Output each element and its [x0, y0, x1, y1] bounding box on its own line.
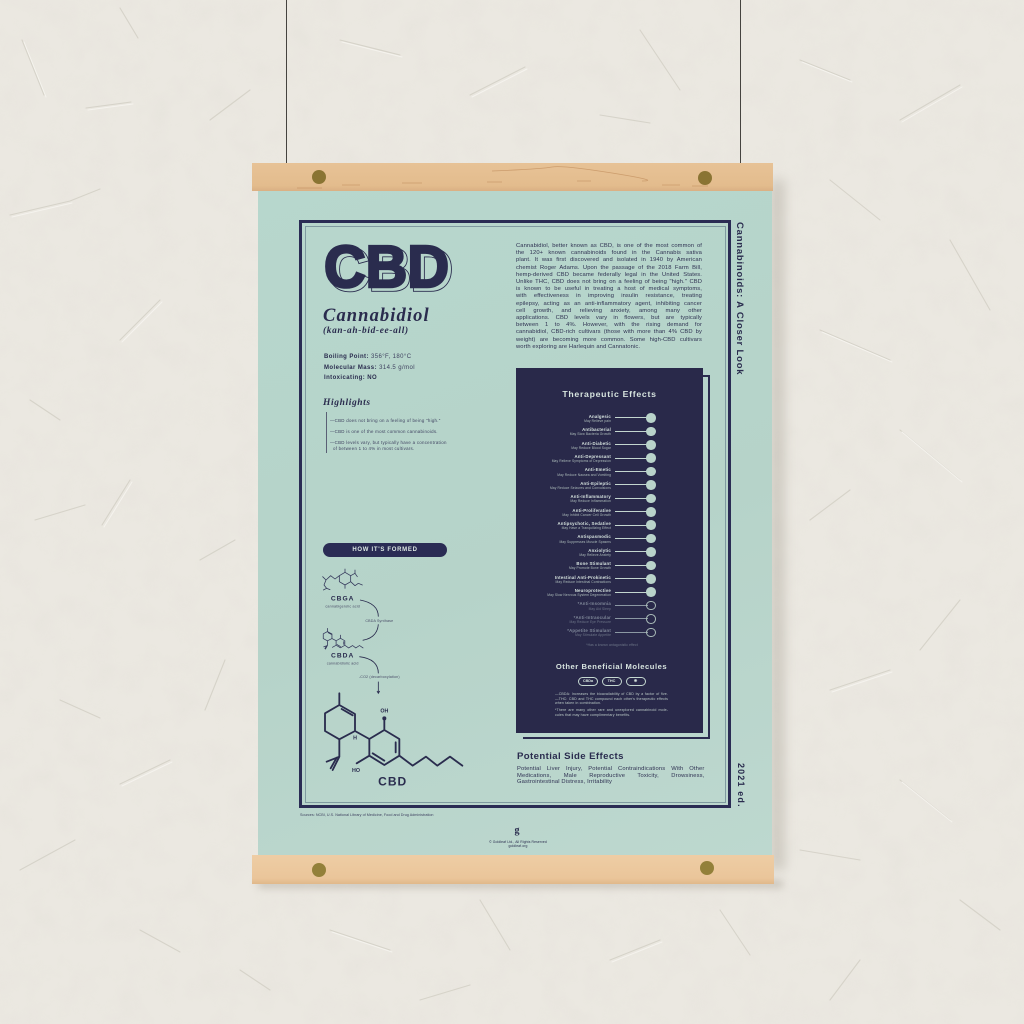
intro paragraph: is known to be useful in treating a host of medical symptoms, — [516, 286, 702, 292]
right hanging wire — [740, 0, 741, 164]
text: Molecular Mass: 314.5 g/mol — [324, 365, 415, 371]
effect: Antipsychotic, Sedative: Antipsychotic, Sedative — [557, 521, 611, 526]
effect: Anti-Proliferative: Anti-Proliferative — [572, 508, 611, 513]
decarboxylation label: -CO2 (decarboxylation) — [359, 675, 400, 679]
other beneficial molecules heading: Other Beneficial Molecules — [556, 662, 667, 670]
effect: Appetite Stimulant: May Stimulate Appetite — [575, 633, 611, 637]
effect: Anti-Insomnia: *Anti-Insomnia — [578, 601, 611, 606]
how it's formed pill heading — [323, 543, 447, 557]
H label: H — [353, 736, 357, 742]
highlight 3: of between 1 to 4% in most cultivars. — [333, 446, 414, 450]
molecule notes: cules that may have complimentary benefits. — [555, 712, 630, 716]
effect: Appetite Stimulant: *Appetite Stimulant — [567, 628, 611, 633]
highlight 1: —CBD does not bring on a feeling of being "high." — [330, 418, 441, 422]
HO label: HO — [352, 768, 360, 774]
panel: therapeutic effects — [516, 368, 703, 733]
effect: Anti-Inflammatory — [570, 494, 656, 503]
highlight 3: —CBD levels vary, but typically have a concentration — [330, 440, 447, 444]
effect: Bone Stimulant — [569, 561, 656, 570]
intro paragraph — [516, 243, 702, 350]
top left screw — [312, 170, 326, 184]
effect: Anti-Intraocular — [569, 614, 656, 624]
potential side effects text: Potential Liver Injury, Potential Contraindications With Other — [517, 766, 704, 772]
highlights vertical rule — [326, 412, 327, 453]
effect: Anti-Proliferative — [562, 507, 656, 517]
effect: Anxiolytic: Anxiolytic — [588, 548, 611, 553]
intro paragraph: Cannabidiol, better known as CBD, is one of the most common of — [516, 243, 702, 249]
left hanging wire — [286, 0, 287, 164]
highlight 2: —CBD is one of the most common cannabinoids. — [330, 428, 438, 434]
effect: Intestinal Anti-Prokinetic: Intestinal Anti-Prokinetic — [555, 575, 611, 580]
sources: Sources: NCBI, U.S. National Library of Medicine, Food and Drug Administration — [300, 813, 434, 817]
effect: Neuroprotective — [547, 587, 656, 597]
effect: Anxiolytic — [579, 547, 656, 557]
CBGA label: CBGA — [331, 596, 354, 603]
effect: Anti-Epileptic: Anti-Epileptic — [580, 481, 611, 486]
formation diagram — [322, 568, 464, 789]
effect: Bone Stimulant: Bone Stimulant — [576, 561, 611, 566]
potential side effects text: Gastrointestinal Distress, Irritability — [517, 779, 612, 785]
effect: Antipsychotic, Sedative: May Have a Tranquilizing Effect — [562, 526, 611, 530]
top right screw — [698, 170, 712, 184]
therapeutic effects heading: Therapeutic Effects — [562, 389, 657, 399]
effect: Anti-Diabetic — [571, 440, 656, 450]
effect: Intestinal Anti-Prokinetic: May Reduce Intestinal Contractions — [556, 580, 611, 584]
CBD molecule — [325, 693, 462, 770]
molecule notes — [555, 692, 668, 717]
effect: Anti-Diabetic: Anti-Diabetic — [582, 441, 611, 446]
molecule notes: *There are many other rare and unexplored cannabinoid mole- — [555, 708, 668, 712]
intro paragraph: cell growth, and relieving anxiety, among many other — [516, 308, 702, 314]
effect: Antipsychotic, Sedative — [557, 520, 656, 530]
top wooden hanger — [252, 163, 773, 191]
CBDA label: CBDA — [331, 653, 354, 660]
potential side effects text — [517, 766, 704, 785]
inner frame — [305, 226, 726, 803]
poster shadow on wall — [770, 180, 784, 870]
arc from CBDA to decarboxylation — [359, 657, 378, 673]
pronunciation: (kan-ah-bid-ee-all) — [323, 326, 409, 336]
intro paragraph: between 1 to 4%. However, with the rising demand for — [516, 322, 702, 328]
effect: Analgesic — [584, 413, 656, 423]
vertical edition: 2021 ed. — [736, 763, 746, 808]
panel offset outline — [523, 375, 710, 739]
effect: Anxiolytic: May Relieve Anxiety — [579, 553, 611, 557]
name: Cannabidiol: Cannabidiol — [323, 306, 430, 326]
effect: Anti-Inflammatory: May Reduce Inflammation — [570, 499, 611, 503]
highlight 3 — [330, 440, 447, 450]
effect: Antispasmodic: Antispasmodic — [577, 534, 611, 539]
effect: Antibacterial: May Slow Bacteria Growth — [570, 432, 611, 436]
effect: Anti-Epileptic: May Reduce Seizures and Convulsions — [550, 486, 611, 490]
text: Intoxicating: NO — [324, 375, 377, 381]
CBDA synthase label: CBDA Synthase — [365, 619, 393, 623]
effect: Neuroprotective: Neuroprotective — [575, 588, 611, 593]
effect: Anti-Depressant: Anti-Depressant — [574, 454, 611, 459]
effect: Anti-Emetic — [557, 467, 656, 477]
effect: Analgesic: Analgesic — [589, 414, 611, 419]
intro paragraph: chemist Roger Adams. Upon the passage of the 2018 Farm Bill, — [516, 265, 702, 271]
CBGA molecule — [323, 569, 362, 590]
arrow to CBD — [377, 682, 380, 693]
effect: Anti-Inflammatory: Anti-Inflammatory — [570, 494, 611, 499]
text: Boiling Point: 356°F, 180°C — [324, 354, 412, 360]
copyright: goldleaf.org — [509, 844, 527, 848]
lower hanger shadow — [258, 880, 783, 888]
intro paragraph: worth exploring are Harlequin and Cannatonic. — [516, 344, 640, 350]
effect: Anti-Diabetic: May Reduce Blood Sugar — [571, 446, 611, 450]
potential side effects heading: Potential Side Effects — [517, 751, 624, 762]
CBDA molecule — [323, 628, 363, 649]
bottom right screw — [700, 861, 714, 875]
effect: Antispasmodic: May Suppresses Muscle Spasms — [559, 540, 611, 544]
potential side effects text: Medications, Male Reproductive Toxicity, Drowsiness, — [517, 772, 704, 778]
CBD logo — [324, 238, 452, 298]
effect: Antispasmodic — [559, 534, 656, 544]
molecule notes: when taken in combination. — [555, 701, 601, 705]
antagonistic footnote: *Has a known antagonistic effect — [586, 643, 638, 647]
effect: Appetite Stimulant — [567, 628, 656, 637]
effect: Anti-Epileptic — [550, 480, 656, 490]
molecule notes: —CBDA: Increases the bioavailability of CBD by a factor of five. — [555, 692, 668, 696]
effect: Antibacterial: Antibacterial — [582, 427, 611, 432]
effect: Anti-Emetic: May Reduce Nausea and Vomiting — [557, 473, 611, 477]
intro paragraph: with effectiveness in improving insulin resistance, treating — [516, 293, 702, 299]
molecule pills: ❋ — [634, 679, 637, 683]
highlights heading: Highlights — [323, 398, 371, 408]
molecule pills: CBDa — [583, 679, 593, 683]
copyright: © Goldleaf Ltd., All Rights Reserved — [489, 840, 547, 844]
molecule pills — [578, 677, 646, 686]
how it's formed pill heading: HOW IT'S FORMED — [352, 547, 418, 553]
publisher logo: g — [514, 825, 520, 836]
effect: Intestinal Anti-Prokinetic — [555, 574, 656, 584]
intro paragraph: epilepsy, acting as an anti-inflammatory agent, inhibiting cancer — [516, 301, 702, 307]
intro paragraph: applications. CBD levels vary in flowers, but are typically — [516, 315, 702, 321]
vertical title: Cannabinoids: A Closer Look — [734, 222, 745, 375]
key facts — [324, 354, 415, 381]
intro paragraph: weight) are becoming more common. Some high-CBD cultivars — [516, 337, 702, 343]
molecule pills: THC — [608, 679, 615, 683]
OH label: OH — [380, 709, 388, 715]
effect: Bone Stimulant: May Promote Bone Growth — [569, 566, 611, 570]
molecule notes: —THC: CBD and THC compound each other's therapeutic effects — [555, 697, 668, 701]
bottom wooden hanger — [252, 855, 774, 884]
cannabigerolic acid label: cannabigerolic acid — [325, 605, 360, 609]
cannabidiolic acid label: cannabidiolic acid — [327, 662, 359, 666]
effect: Antibacterial — [570, 427, 656, 436]
effect: Anti-Intraocular: May Reduce Eye Pressure — [569, 620, 611, 624]
intro paragraph: hemp-derived CBD became federally legal in the United States. — [516, 272, 702, 278]
effect: Analgesic: May Relieve pain — [584, 419, 611, 423]
effect: Anti-Depressant: May Relieve Symptoms of Depression — [552, 459, 611, 463]
poster sheet — [258, 190, 772, 856]
effect: Anti-Intraocular: *Anti-Intraocular — [574, 615, 611, 620]
intro paragraph: cannabidiol, CBD-rich cultivars (those with more than 4% CBD by — [516, 329, 702, 335]
effect: Anti-Insomnia — [578, 601, 656, 611]
CBD molecule label: CBD — [378, 775, 407, 789]
effect: Anti-Insomnia: May Aid Sleep — [589, 607, 611, 611]
outer frame — [299, 220, 731, 808]
effect: Anti-Depressant — [552, 453, 656, 463]
effect: Anti-Emetic: Anti-Emetic — [585, 467, 611, 472]
copyright — [489, 840, 547, 848]
intro paragraph: plant. It was first discovered and isolated in 1940 by American — [516, 257, 702, 263]
effect: Neuroprotective: May Slow Nervous System Degeneration — [547, 593, 611, 597]
effect: Anti-Proliferative: May Inhibit Cancer Cell Growth — [562, 513, 611, 517]
arc from CBGA to CBDA — [360, 600, 378, 640]
intro paragraph: Unlike THC, CBD does not bring on a feeling of being "high." CBD — [516, 279, 702, 285]
bottom left screw — [312, 863, 326, 877]
intro paragraph: the 120+ known cannabinoids found in the Cannabis sativa — [516, 250, 702, 256]
